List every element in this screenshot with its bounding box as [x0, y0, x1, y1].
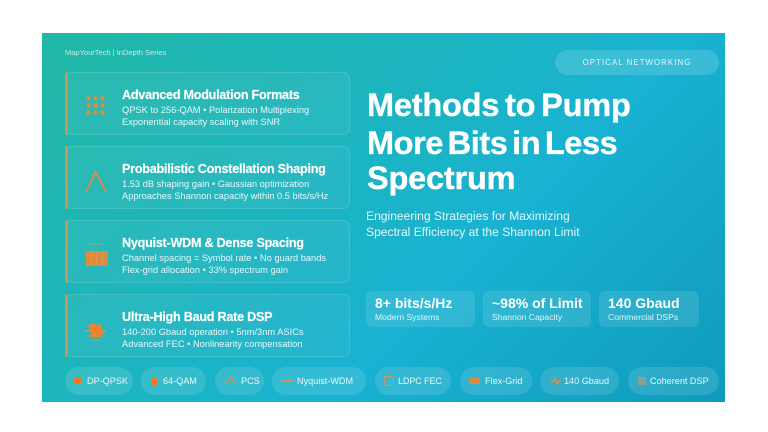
- subtitle: Spectral Efficiency at the Shannon Limit: [366, 224, 580, 238]
- pill icon: [384, 376, 394, 386]
- main title line 2: More Bits in Less: [367, 125, 617, 161]
- description: 140-200 Gbaud operation • 5nm/3nm ASICs: [122, 327, 304, 337]
- badge: optical networking: [555, 50, 719, 75]
- icon: dsp chip: [85, 323, 106, 341]
- stat value: 140 Gbaud: [608, 295, 680, 311]
- pill label: LDPC FEC: [398, 376, 442, 386]
- description: [122, 327, 304, 349]
- subtitle: Engineering Strategies for Maximizing: [366, 209, 570, 223]
- slide background: [42, 33, 725, 402]
- pill: DP-QPSK: [65, 367, 133, 395]
- description: Exponential capacity scaling with SNR: [122, 117, 280, 127]
- panel: nyquist wdm: [65, 220, 350, 283]
- accent bar: [64, 220, 68, 283]
- pill icon: [638, 377, 646, 385]
- pill label: PCS: [241, 376, 260, 386]
- pill label: Flex-Grid: [485, 376, 522, 386]
- pill icon: [74, 377, 81, 384]
- panel: baud rate dsp: [65, 294, 350, 357]
- subtitle: [366, 209, 580, 238]
- stat label: Modern Systems: [375, 312, 439, 322]
- description: 1.53 dB shaping gain • Gaussian optimization: [122, 179, 309, 189]
- heading: Probabilistic Constellation Shaping: [122, 162, 326, 176]
- main title: Methods to Pump: [367, 87, 631, 123]
- stat card: modern systems: [366, 291, 475, 327]
- description: Approaches Shannon capacity within 0.5 bits/s/Hz: [122, 191, 328, 201]
- pill: LDPC FEC: [375, 367, 451, 395]
- description: [122, 179, 328, 201]
- pill icon: [282, 380, 293, 382]
- pill label: Nyquist-WDM: [297, 376, 353, 386]
- pill icon: [550, 376, 561, 386]
- stat label: Shannon Capacity: [492, 312, 562, 322]
- pill label: DP-QPSK: [87, 376, 128, 386]
- panel: modulation formats: [65, 72, 350, 135]
- description: Flex-grid allocation • 33% spectrum gain: [122, 265, 288, 275]
- stat card: shannon capacity: [483, 291, 591, 327]
- accent bar: [64, 294, 68, 357]
- heading: Nyquist-WDM & Dense Spacing: [122, 236, 304, 250]
- stat value: ~98% of Limit: [492, 295, 583, 311]
- icon: gaussian triangle: [85, 170, 107, 192]
- description: [122, 105, 309, 127]
- description: [122, 253, 326, 275]
- pill: PCS: [215, 367, 264, 395]
- badge: optical networking: OPTICAL NETWORKING: [583, 58, 691, 67]
- pill icon: [470, 378, 480, 384]
- main title line 3: Spectrum: [367, 160, 515, 196]
- pill label: 64-QAM: [163, 376, 197, 386]
- pill: Flex-Grid: [460, 367, 532, 395]
- icon: constellation grid: [86, 96, 105, 115]
- pill: 140 Gbaud: [540, 367, 619, 395]
- pill label: Coherent DSP: [650, 376, 709, 386]
- heading: Advanced Modulation Formats: [122, 88, 300, 102]
- pill: Nyquist-WDM: [272, 367, 366, 395]
- pill: Coherent DSP: [628, 367, 719, 395]
- icon: spectrum channels: [86, 243, 108, 266]
- accent bar: [64, 72, 68, 135]
- pill label: 140 Gbaud: [564, 376, 609, 386]
- heading: Ultra-High Baud Rate DSP: [122, 310, 272, 324]
- pill icon: [151, 377, 157, 385]
- pill: 64-QAM: [141, 367, 206, 395]
- description: Channel spacing = Symbol rate • No guard bands: [122, 253, 326, 263]
- stat card: commercial dsps: [599, 291, 699, 327]
- accent bar: [64, 146, 68, 209]
- stat value: 8+ bits/s/Hz: [375, 295, 452, 311]
- series label: MapYourTech | InDepth Series: [65, 48, 166, 57]
- pill icon: [225, 376, 236, 384]
- panel: constellation shaping: [65, 146, 350, 209]
- description: Advanced FEC • Nonlinearity compensation: [122, 339, 303, 349]
- stat label: Commercial DSPs: [608, 312, 678, 322]
- description: QPSK to 256-QAM • Polarization Multiplexing: [122, 105, 309, 115]
